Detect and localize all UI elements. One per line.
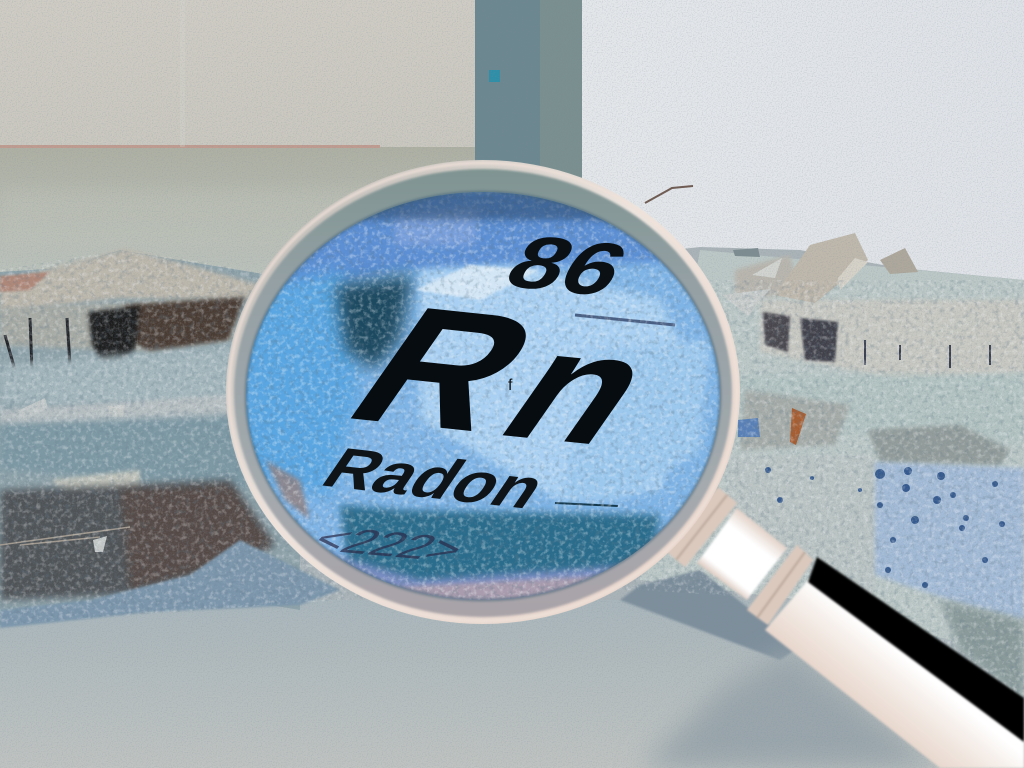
lens texture <box>240 190 730 610</box>
background: central concrete column <box>475 0 582 180</box>
handle <box>667 487 1024 768</box>
rubble texture overlay <box>0 250 1024 700</box>
rubble band, right side <box>620 233 1024 700</box>
rim highlight <box>229 163 737 621</box>
collar ring 2 <box>747 545 813 625</box>
small f mark: f <box>508 377 513 394</box>
terrazzo speckles <box>765 467 1005 588</box>
background: floor <box>0 600 1024 768</box>
element symbol: R: R <box>314 272 577 465</box>
handle body <box>765 578 1024 768</box>
rim <box>226 160 740 624</box>
rubble band, left side <box>0 249 340 628</box>
element symbol: n: n <box>468 298 695 477</box>
atomic mass: <222> <box>301 520 476 569</box>
background: right white wall <box>582 0 1024 280</box>
magnifying glass <box>226 160 1024 768</box>
element name: Radon <box>310 437 559 521</box>
lens <box>240 190 730 610</box>
glass band <box>234 169 732 617</box>
lens edge shadow <box>246 192 720 600</box>
handle neck <box>697 508 787 600</box>
black stripe <box>808 557 1024 742</box>
atomic number: 86 <box>491 220 644 311</box>
floor shadow wedge <box>640 650 940 768</box>
collar ring 1 <box>667 487 737 567</box>
background: left concrete wall <box>0 0 476 290</box>
rubble rocks <box>722 233 980 340</box>
